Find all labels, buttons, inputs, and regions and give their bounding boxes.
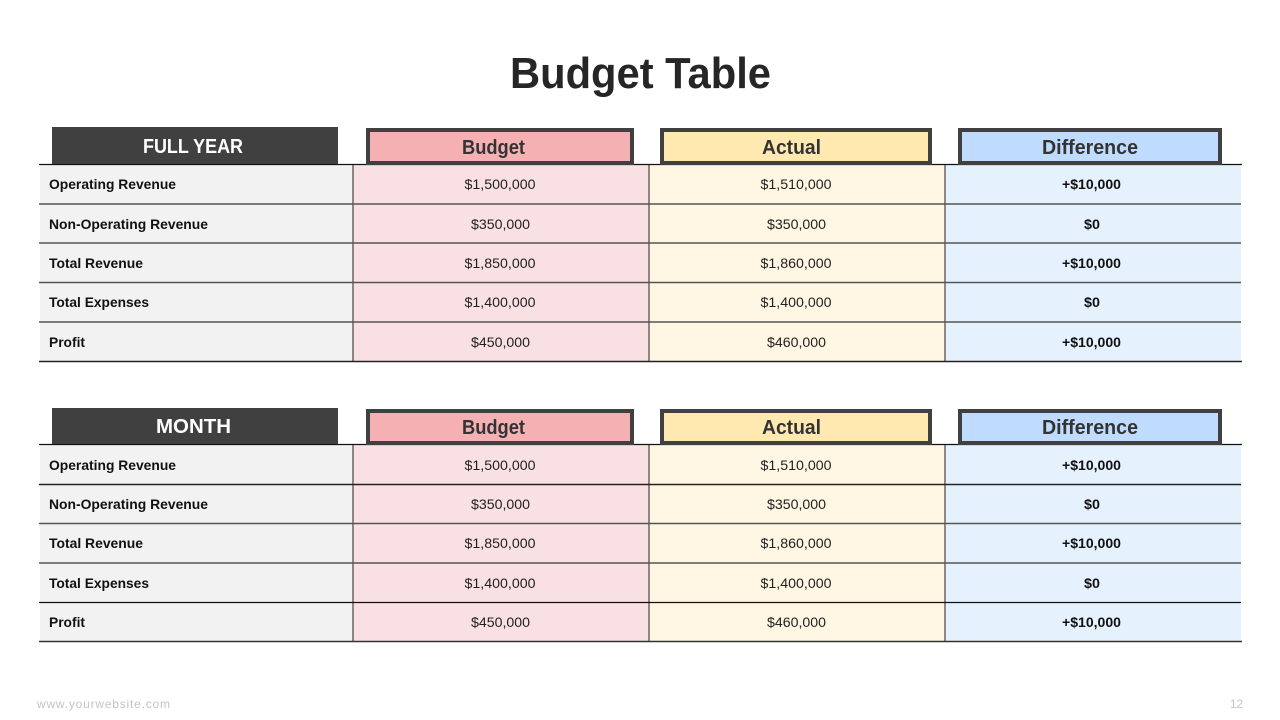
row: total expenses: Total Expenses xyxy=(49,294,149,310)
row: non-operating revenue: $350,000 xyxy=(767,496,826,512)
row: operating revenue: Operating Revenue xyxy=(49,176,176,192)
row: profit: Profit xyxy=(49,334,85,350)
row: total revenue: Total Revenue xyxy=(49,535,143,551)
row: operating revenue: Operating Revenue xyxy=(49,457,176,473)
row backgrounds: full year xyxy=(40,164,1241,361)
row: non-operating revenue xyxy=(49,496,1100,512)
row: total revenue: $1,850,000 xyxy=(464,535,536,551)
row: total revenue: $1,850,000 xyxy=(464,255,536,271)
panel: full year table xyxy=(39,127,1242,362)
row: total expenses: $1,400,000 xyxy=(464,294,536,310)
row: non-operating revenue: $350,000 xyxy=(767,216,826,232)
title: Budget Table xyxy=(510,49,771,98)
footer: website: www.yourwebsite.com xyxy=(36,697,170,711)
row: profit xyxy=(49,614,1121,630)
row: total revenue xyxy=(49,255,1121,271)
row: profit: $460,000 xyxy=(767,334,826,350)
header: month xyxy=(52,408,338,444)
row: total expenses: $1,400,000 xyxy=(760,294,832,310)
row: total revenue: $1,860,000 xyxy=(760,535,832,551)
row: operating revenue xyxy=(49,176,1121,192)
row: profit: +$10,000 xyxy=(1062,614,1121,630)
footer: page number: 12 xyxy=(1230,697,1243,711)
row: total expenses xyxy=(49,575,1100,591)
row: total revenue: +$10,000 xyxy=(1062,255,1121,271)
row: non-operating revenue: $0 xyxy=(1084,496,1100,512)
header: full year: FULL YEAR xyxy=(143,136,243,158)
header: difference xyxy=(960,130,1220,163)
row: total revenue: +$10,000 xyxy=(1062,535,1121,551)
row: total revenue: $1,860,000 xyxy=(760,255,832,271)
header: actual: Actual xyxy=(762,417,821,439)
header: full year xyxy=(52,127,338,164)
header: difference: Difference xyxy=(1042,417,1138,439)
row: profit xyxy=(49,334,1121,350)
row: total expenses: $1,400,000 xyxy=(464,575,536,591)
row: operating revenue: $1,510,000 xyxy=(760,176,832,192)
row: non-operating revenue xyxy=(49,216,1100,232)
panel: month table xyxy=(39,408,1242,642)
header: month: MONTH xyxy=(156,416,231,438)
row: non-operating revenue: $350,000 xyxy=(471,496,530,512)
row: profit: Profit xyxy=(49,614,85,630)
row: profit: $450,000 xyxy=(471,334,530,350)
row: total revenue: Total Revenue xyxy=(49,255,143,271)
header: actual xyxy=(662,411,930,443)
header: difference xyxy=(960,411,1220,443)
header: budget: Budget xyxy=(462,137,525,159)
row: total revenue xyxy=(49,535,1121,551)
row: profit: +$10,000 xyxy=(1062,334,1121,350)
header: actual xyxy=(662,130,930,163)
row: total expenses: $0 xyxy=(1084,294,1100,310)
row: profit: $460,000 xyxy=(767,614,826,630)
row: non-operating revenue: Non-Operating Revenue xyxy=(49,216,208,232)
row: profit: $450,000 xyxy=(471,614,530,630)
header: actual: Actual xyxy=(762,137,821,159)
row: operating revenue: $1,500,000 xyxy=(464,457,536,473)
row: operating revenue: +$10,000 xyxy=(1062,457,1121,473)
header: difference: Difference xyxy=(1042,137,1138,159)
row: total expenses: $1,400,000 xyxy=(760,575,832,591)
row: total expenses xyxy=(49,294,1100,310)
row: non-operating revenue: $0 xyxy=(1084,216,1100,232)
row: non-operating revenue: Non-Operating Revenue xyxy=(49,496,208,512)
row: operating revenue: $1,500,000 xyxy=(464,176,536,192)
row: total expenses: $0 xyxy=(1084,575,1100,591)
header: budget xyxy=(368,411,632,443)
row: operating revenue: +$10,000 xyxy=(1062,176,1121,192)
row: non-operating revenue: $350,000 xyxy=(471,216,530,232)
header: budget: Budget xyxy=(462,417,525,439)
row: total expenses: Total Expenses xyxy=(49,575,149,591)
row: operating revenue xyxy=(49,457,1121,473)
header: budget xyxy=(368,130,632,163)
row: operating revenue: $1,510,000 xyxy=(760,457,832,473)
row backgrounds: month xyxy=(40,445,1241,641)
